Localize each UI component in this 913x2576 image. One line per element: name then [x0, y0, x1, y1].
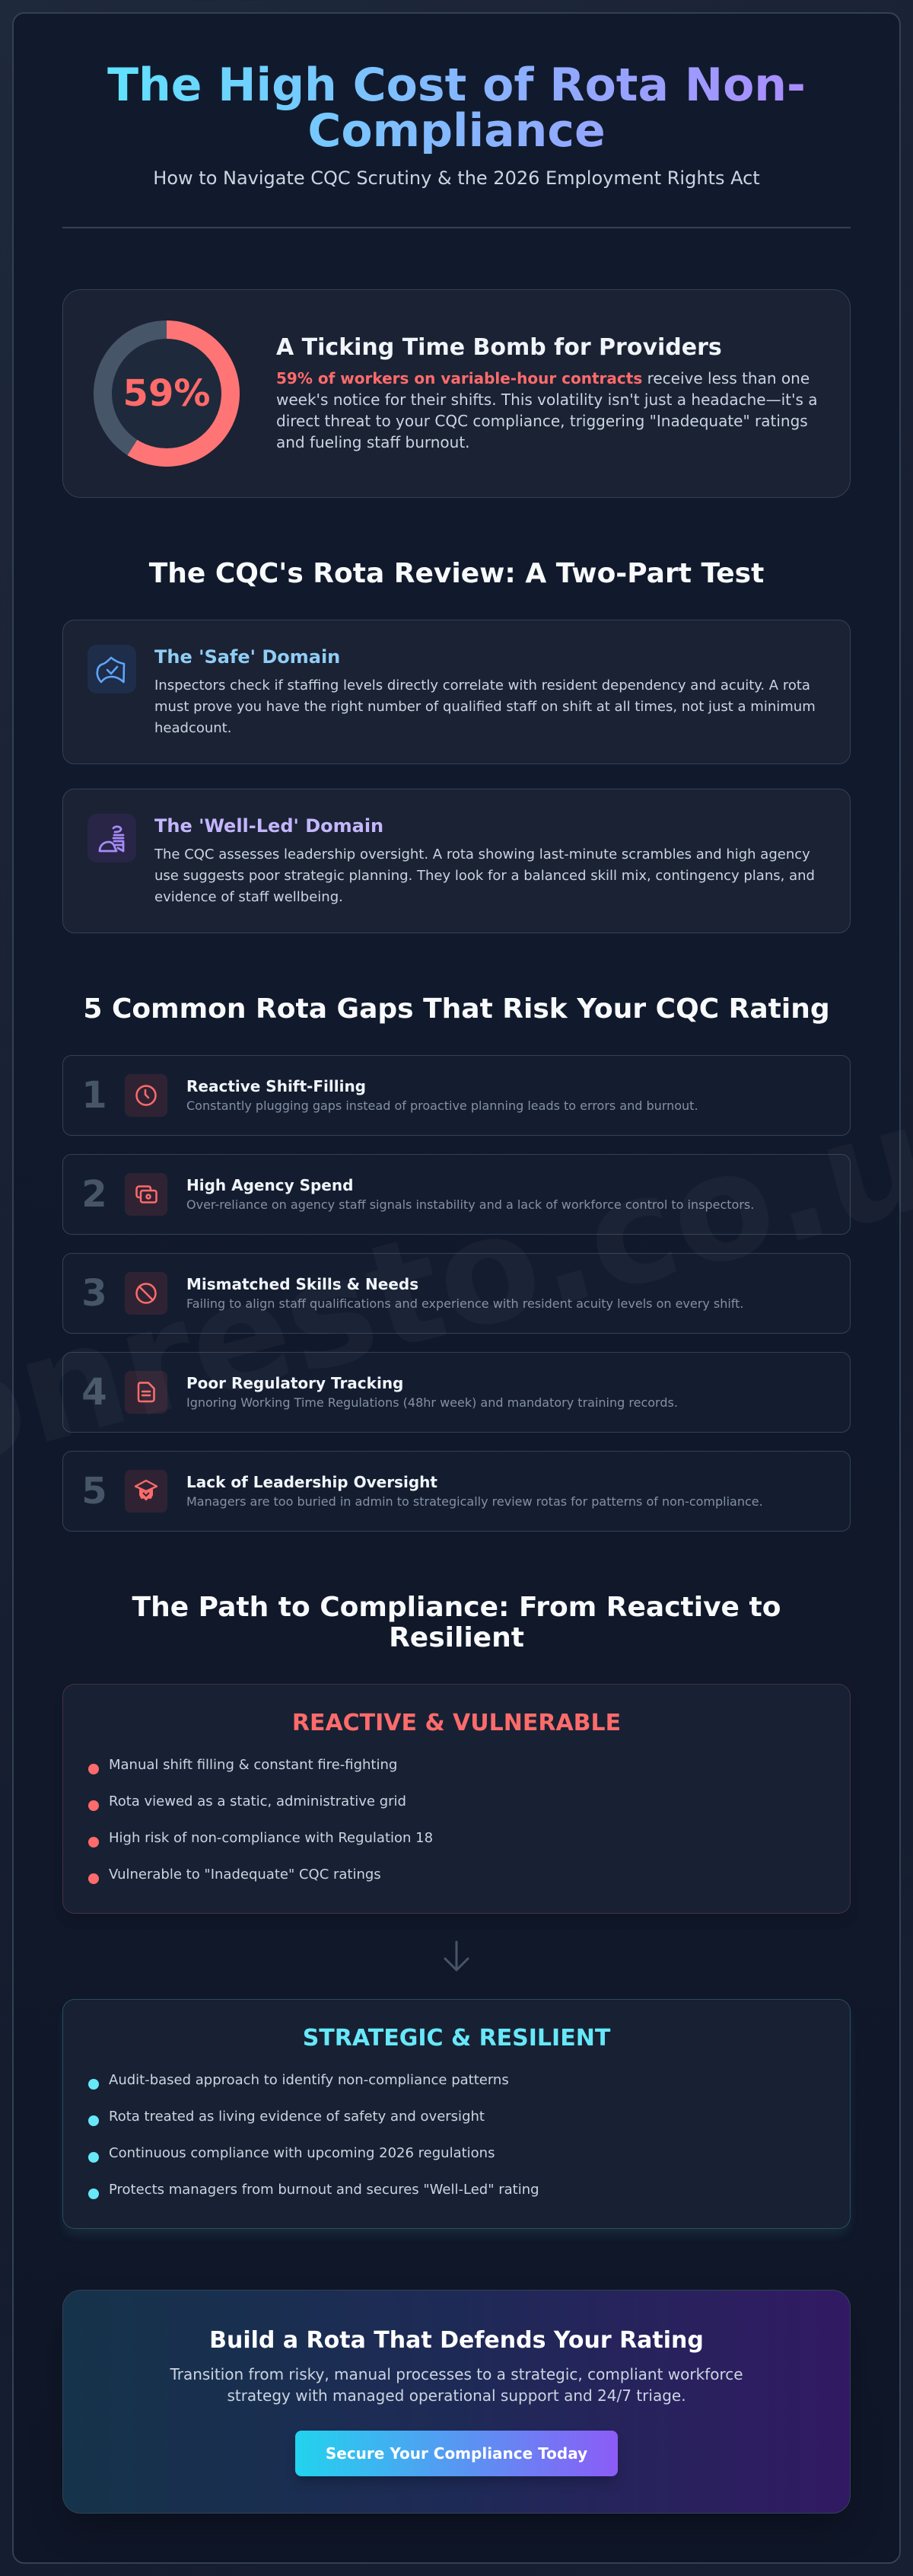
stat text: direct threat to your CQC compliance, triggering "Inadequate" ratings	[276, 412, 808, 430]
gap text	[186, 1473, 763, 1509]
gap row 5	[62, 1451, 851, 1532]
gap text	[186, 1077, 698, 1113]
cta text	[170, 2365, 743, 2405]
heading: path to compliance	[132, 1592, 781, 1653]
panel heading: STRATEGIC & RESILIENT	[303, 2025, 610, 2052]
bullet list: High risk of non-compliance with Regulation 18	[109, 1830, 433, 1846]
icon: clock	[125, 1074, 167, 1117]
gap row 3	[62, 1253, 851, 1334]
title	[62, 62, 851, 154]
stat text: and fueling staff burnout.	[276, 433, 470, 451]
subtitle: How to Navigate CQC Scrutiny & the 2026 Employment Rights Act	[153, 167, 760, 189]
bullet list: Rota treated as living evidence of safety and oversight	[109, 2109, 485, 2125]
gap text: Failing to align staff qualifications and experience with resident acuity levels on every shift.	[186, 1296, 744, 1311]
gap text: Managers are too buried in admin to strategically review rotas for patterns of non-compliance.	[186, 1494, 763, 1509]
stat text: 59% of workers on variable-hour contracts receive less than one	[276, 369, 810, 387]
number 5: 5	[81, 1470, 107, 1513]
panel: reactive and vulnerable	[62, 1684, 851, 1914]
number 4: 4	[81, 1371, 107, 1414]
gap text: Constantly plugging gaps instead of proactive planning leads to errors and burnout.	[186, 1098, 698, 1113]
cta text: Transition from risky, manual processes to a strategic, compliant workforce	[170, 2365, 743, 2383]
number 1: 1	[81, 1074, 107, 1117]
bullet list	[88, 2072, 539, 2199]
gap text: Poor Regulatory Tracking	[186, 1374, 403, 1392]
gap text: Reactive Shift-Filling	[186, 1077, 366, 1095]
bullet list: Audit-based approach to identify non-compliance patterns	[109, 2072, 509, 2088]
stat text: week's notice for their shifts. This volatility isn't just a headache—it's a	[276, 391, 817, 409]
panel: safe domain	[62, 620, 851, 764]
gap row 2	[62, 1154, 851, 1235]
domain text: use suggests poor strategic planning. They look for a balanced skill mix, contingency plans, and	[154, 868, 815, 884]
bullet list	[88, 1757, 433, 1884]
bullet list: Continuous compliance with upcoming 2026 regulations	[109, 2145, 495, 2161]
domain text	[154, 677, 816, 736]
donut value: 59%	[123, 372, 210, 415]
number 2: 2	[81, 1173, 107, 1216]
heading: two-part test: The CQC's Rota Review: A Two-Part Test	[149, 558, 764, 589]
donut value	[112, 339, 221, 448]
cta heading: Build a Rota That Defends Your Rating	[209, 2327, 704, 2354]
icon: document	[125, 1371, 167, 1414]
bullet list: Vulnerable to "Inadequate" CQC ratings	[109, 1867, 381, 1883]
gap text: Mismatched Skills & Needs	[186, 1275, 418, 1293]
gap row 1	[62, 1055, 851, 1136]
gap text: Ignoring Working Time Regulations (48hr week) and mandatory training records.	[186, 1395, 678, 1410]
icon: graduate	[125, 1470, 167, 1513]
gap text: Lack of Leadership Oversight	[186, 1473, 437, 1491]
stat heading: A Ticking Time Bomb for Providers	[276, 334, 722, 361]
panel: ticking time bomb stat	[62, 289, 851, 498]
title: The High Cost of Rota Non-	[107, 59, 806, 112]
bullet list: Protects managers from burnout and secures "Well-Led" rating	[109, 2182, 539, 2198]
heading: rota gaps: 5 Common Rota Gaps That Risk Your CQC Rating	[83, 993, 830, 1025]
icon: shield check	[87, 645, 136, 693]
heading: path to compliance: The Path to Compliance: From Reactive to	[132, 1592, 781, 1623]
domain text: Inspectors check if staffing levels directly correlate with resident dependency and acuity. A rota	[154, 677, 810, 693]
gap row 4	[62, 1352, 851, 1433]
domain text: The CQC assesses leadership oversight. A rota showing last-minute scrambles and high agency	[154, 846, 810, 862]
gap text: High Agency Spend	[186, 1176, 353, 1194]
domain text: headcount.	[154, 720, 231, 736]
panel: well-led domain	[62, 789, 851, 933]
cta text: strategy with managed operational support and 24/7 triage.	[227, 2386, 686, 2405]
domain title: The 'Safe' Domain	[154, 646, 340, 668]
icon: leader	[87, 814, 136, 862]
gap text: Over-reliance on agency staff signals instability and a lack of workforce control to inspectors.	[186, 1197, 754, 1212]
icon: banknotes	[125, 1173, 167, 1216]
domain text: must prove you have the right number of qualified staff on shift at all times, not just a minimum	[154, 699, 816, 715]
title: Compliance	[307, 104, 606, 158]
panel heading: REACTIVE & VULNERABLE	[292, 1710, 621, 1736]
number 3: 3	[81, 1272, 107, 1315]
heading: path to compliance: Resilient	[389, 1622, 524, 1653]
arrow: down	[444, 1941, 469, 1972]
domain text: evidence of staff wellbeing.	[154, 889, 343, 905]
donut chart: 59%	[94, 320, 240, 467]
bullet list: Manual shift filling & constant fire-fighting	[109, 1757, 397, 1773]
stat text	[276, 369, 817, 451]
domain title: The 'Well-Led' Domain	[154, 815, 383, 837]
gap text	[186, 1176, 754, 1212]
panel: call to action	[62, 2290, 851, 2514]
panel: strategic and resilient	[62, 1999, 851, 2229]
cta button: Secure Your Compliance Today	[326, 2444, 587, 2463]
gap text	[186, 1275, 744, 1311]
icon: prohibited	[125, 1272, 167, 1315]
domain text	[154, 846, 815, 905]
bullet list: Rota viewed as a static, administrative grid	[109, 1793, 406, 1809]
cta button	[295, 2431, 618, 2476]
gap text	[186, 1374, 678, 1410]
